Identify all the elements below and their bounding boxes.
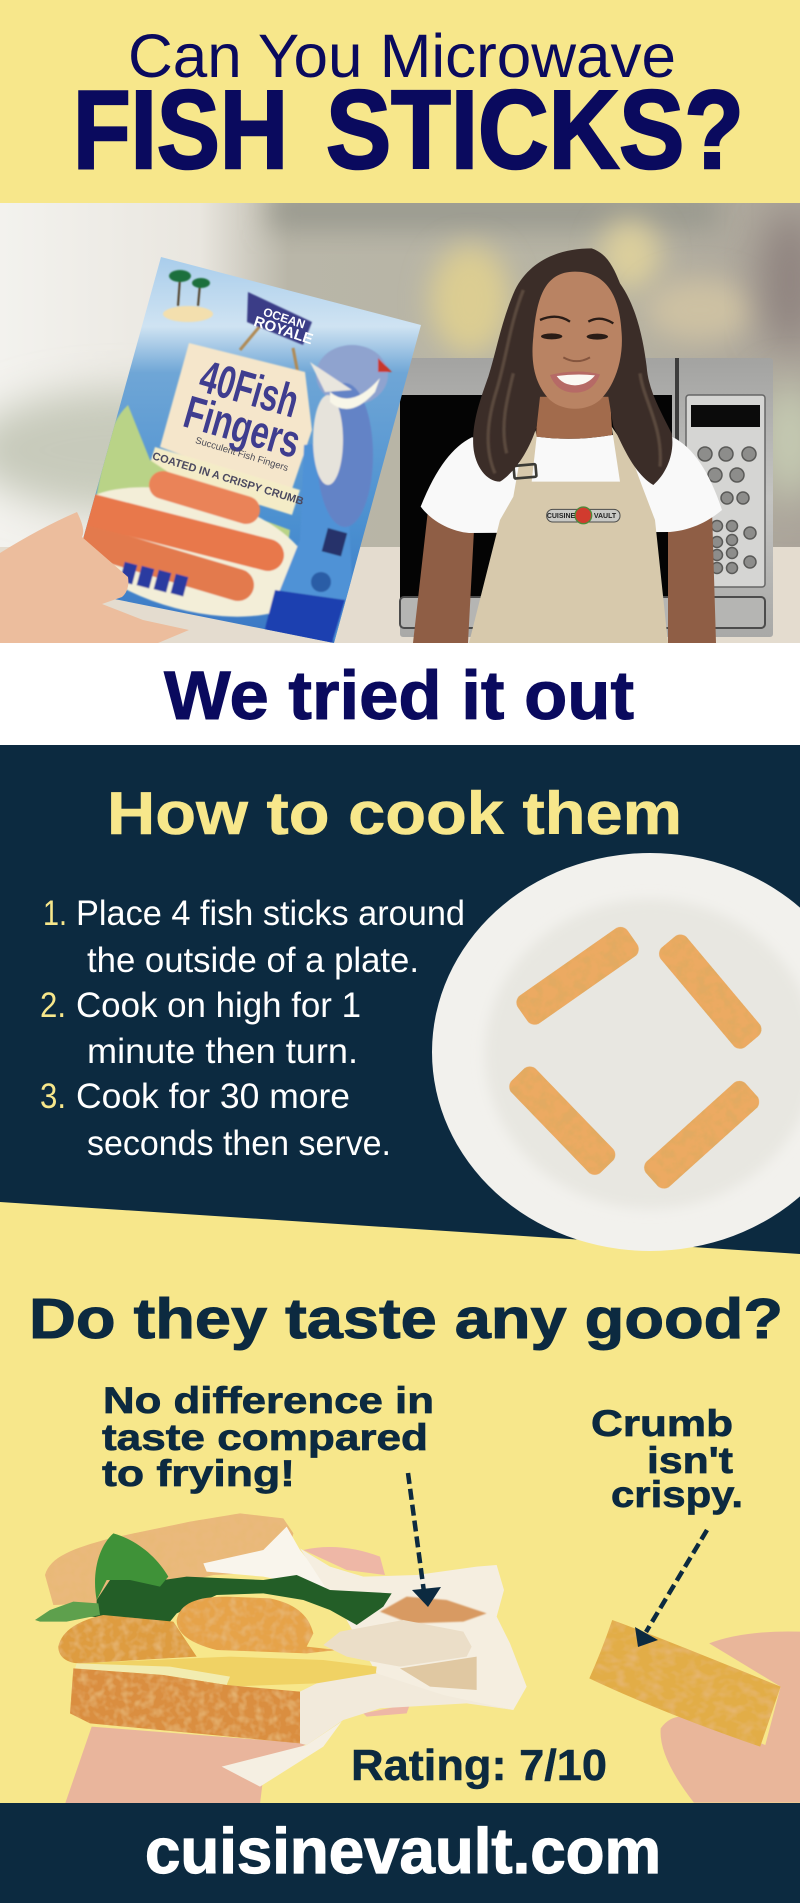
woman — [413, 248, 722, 643]
box text: COATED IN A CRISPY CRUMB — [151, 450, 305, 508]
steps list — [40, 894, 465, 1163]
product box — [54, 257, 421, 650]
title: Can You Microwave — [128, 22, 676, 90]
box text: Fingers — [179, 385, 306, 468]
footer: cuisinevault.com — [145, 1815, 661, 1887]
callout: crumb: isn't — [647, 1440, 733, 1481]
steps list: Cook on high for 1 — [76, 986, 361, 1025]
steps list: 2. — [40, 986, 66, 1025]
apron logo — [547, 507, 620, 524]
steps list: Cook for 30 more — [76, 1077, 350, 1116]
holding hand — [65, 1727, 307, 1804]
neck — [536, 397, 612, 439]
holding hand — [0, 512, 189, 643]
face — [532, 272, 622, 409]
title: FISH — [73, 68, 288, 192]
callout: taste: to frying! — [102, 1453, 295, 1494]
fish stick 1 — [513, 923, 642, 1028]
steps list: seconds then serve. — [87, 1124, 391, 1163]
box text: 40Fish — [194, 350, 305, 427]
steps list: the outside of a plate. — [87, 941, 419, 980]
plate with fish sticks — [432, 853, 800, 1251]
box text: Succulent Fish Fingers — [194, 435, 290, 474]
hero photo — [0, 190, 800, 650]
box text — [151, 305, 315, 508]
callout: crumb: Crumb — [591, 1403, 733, 1444]
fingers behind — [303, 1547, 410, 1717]
apron — [469, 418, 668, 643]
t-shirt — [421, 435, 722, 533]
steps list: 1. — [43, 894, 67, 933]
steps list: 3. — [40, 1077, 66, 1116]
taste heading: Do they taste any good? — [29, 1287, 783, 1351]
arrow: sandwich — [408, 1473, 441, 1607]
photo background: blurred kitchen — [0, 190, 800, 643]
subtitle band: We tried it out — [164, 657, 634, 734]
callout: taste — [102, 1380, 434, 1494]
box text: OCEAN — [261, 305, 307, 332]
cheese and bottom crust — [77, 1657, 377, 1693]
sandwich in hand — [35, 1513, 527, 1804]
arrow: fish stick — [635, 1530, 707, 1647]
footer — [0, 1803, 800, 1903]
buckle — [513, 464, 537, 479]
box artwork — [54, 270, 392, 650]
hair — [473, 248, 672, 485]
top bread — [45, 1513, 293, 1605]
fish pieces — [58, 1615, 197, 1663]
panel: how to cook — [0, 745, 800, 1254]
steps list: minute then turn. — [87, 1032, 358, 1071]
box text: ROYALE — [252, 313, 315, 348]
title: STICKS? — [326, 68, 744, 192]
apron logo: VAULT — [594, 513, 617, 520]
microwave — [400, 358, 773, 637]
callout: crumb — [591, 1403, 743, 1515]
callout: taste: No difference in — [103, 1380, 434, 1421]
callout: taste: taste compared — [102, 1417, 428, 1458]
title — [73, 22, 744, 192]
subtitle band — [0, 643, 800, 745]
fish stick 4 — [641, 1077, 763, 1192]
steps list: Place 4 fish sticks around — [76, 894, 465, 933]
rating: Rating: 7/10 — [351, 1741, 607, 1790]
fish stick 3 — [506, 1063, 619, 1179]
heading: How to cook them — [107, 780, 682, 847]
lettuce — [90, 1575, 392, 1625]
fish stick 2 — [655, 931, 765, 1052]
bitten white bread — [300, 1548, 527, 1710]
arms — [413, 510, 716, 643]
callout: crumb: crispy. — [611, 1474, 743, 1515]
apron logo: CUISINE — [547, 513, 575, 520]
fish stick in hand — [589, 1620, 800, 1803]
